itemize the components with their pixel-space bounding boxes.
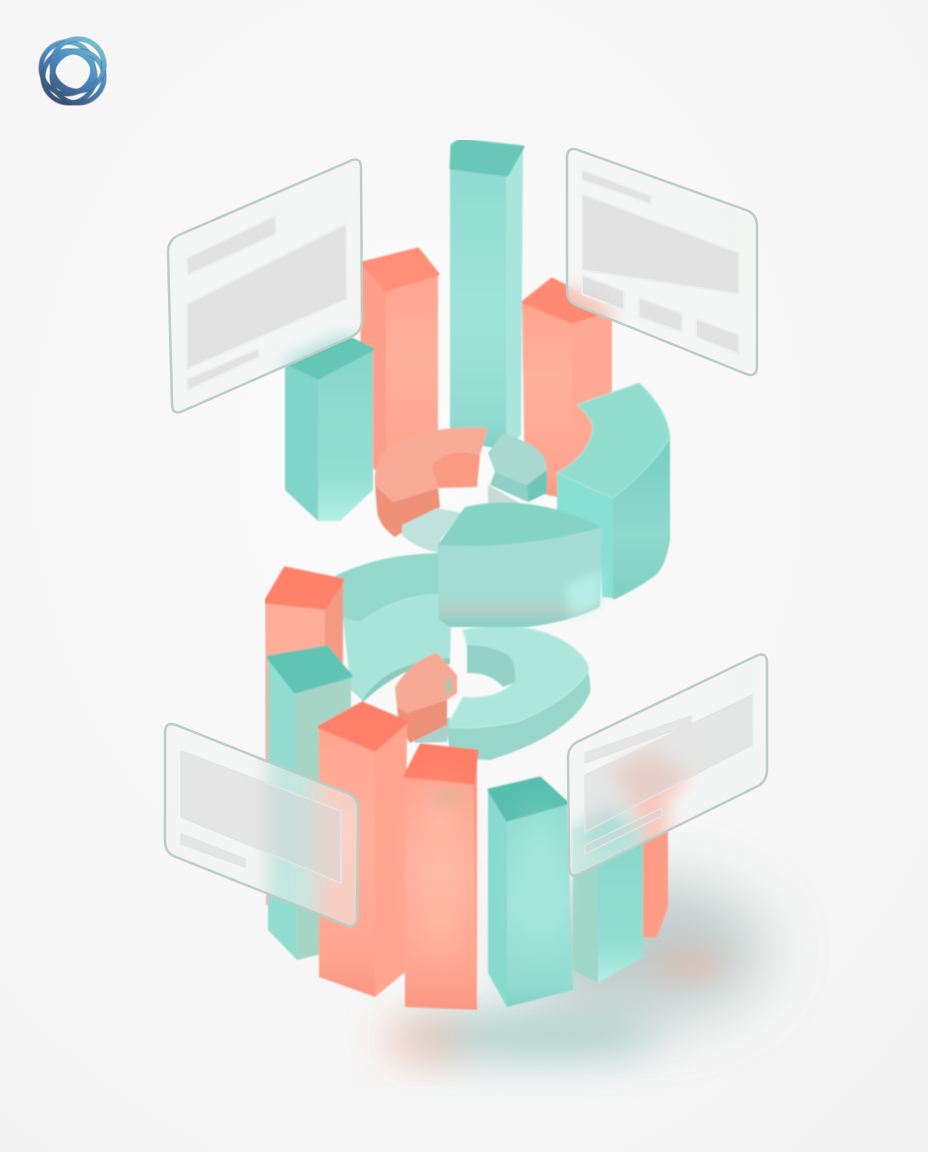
bar: upper left teal xyxy=(285,336,373,521)
bar: tall teal centre xyxy=(450,140,523,450)
bar: upper right coral xyxy=(522,279,612,500)
icon: circular logo xyxy=(41,39,104,103)
bar: lower teal middle xyxy=(488,778,573,1007)
floor shadow xyxy=(383,880,765,1059)
bar: upper coral back xyxy=(362,249,438,480)
bar: lower coral left xyxy=(319,703,407,997)
ring: upper coral arc xyxy=(375,427,488,537)
bar: lower back teal xyxy=(268,647,351,960)
bar: lower teal right xyxy=(573,805,643,983)
bar: lower back coral xyxy=(265,568,343,905)
ring: small pale wedge xyxy=(402,508,462,553)
glass card: top left xyxy=(166,158,364,414)
glass card: bottom right xyxy=(566,653,768,877)
glass card: bottom left xyxy=(164,722,360,928)
ring: lower small coral arc xyxy=(395,653,457,743)
bar: lower coral middle xyxy=(405,745,477,1010)
ring: upper teal wedge xyxy=(488,433,547,505)
ring: right teal arc xyxy=(557,383,670,600)
illustration objects xyxy=(265,140,690,1010)
glass card: top right xyxy=(566,148,758,376)
ring: front teal block xyxy=(438,502,602,627)
ring: lower front teal arc xyxy=(413,626,590,760)
bar: lower right coral xyxy=(612,750,690,937)
ring: lower back teal arc xyxy=(333,553,452,703)
